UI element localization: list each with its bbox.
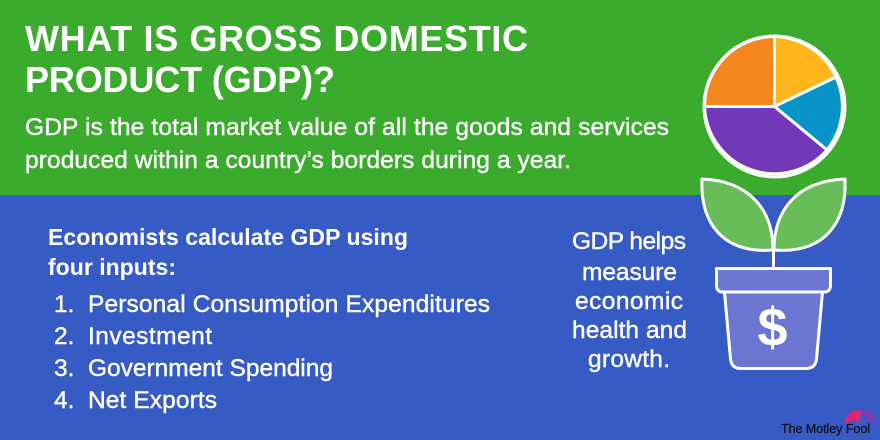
panel: green header background <box>0 0 880 195</box>
right leaf <box>774 179 845 250</box>
list item 3: 3. <box>54 355 74 382</box>
side note text <box>572 228 687 373</box>
pot rim <box>716 268 830 292</box>
logo jester hat <box>845 410 877 425</box>
intro text: four inputs <box>48 224 408 280</box>
pie slice: blue <box>774 77 842 150</box>
icon: plant leaves and stem <box>702 179 845 268</box>
pie slice: purple <box>704 106 827 174</box>
list item 1: Personal Consumption Expenditures <box>88 291 490 318</box>
definition text: produced within a country’s borders during a year. <box>25 147 571 174</box>
side note text: economic <box>575 288 683 315</box>
list item 4: Net Exports <box>88 387 217 414</box>
stem <box>772 250 775 268</box>
pie slice: yellow <box>774 36 836 106</box>
title: WHAT IS GROSS DOMESTIC <box>25 18 528 59</box>
intro text: four inputs: four inputs: <box>48 254 176 280</box>
panel: blue lower background <box>0 195 880 440</box>
dollar sign: $ <box>757 298 788 358</box>
numbered list of GDP inputs <box>54 291 490 414</box>
intro text: four inputs: Economists calculate GDP using <box>48 224 408 250</box>
title <box>25 18 528 100</box>
list item 4: 4. <box>54 387 74 414</box>
definition text <box>25 114 669 174</box>
pie outline <box>704 36 845 177</box>
pot body <box>724 292 822 368</box>
definition text: GDP is the total market value of all the goods and services <box>25 114 669 141</box>
list item 2: Investment <box>88 323 212 350</box>
list item 1: 1. <box>54 291 74 318</box>
icon: flower pot with dollar sign <box>716 268 830 368</box>
side note text: growth. <box>588 346 670 373</box>
side note text: measure <box>582 259 677 286</box>
title: PRODUCT (GDP)? <box>25 59 335 100</box>
left leaf <box>702 179 773 250</box>
side note text: GDP helps <box>572 228 686 255</box>
logo: The Motley Fool <box>781 410 877 436</box>
list item 2: 2. <box>54 323 74 350</box>
side note text: health and <box>572 317 687 344</box>
pie slice: orange <box>704 36 774 106</box>
icon: pie chart flower <box>704 36 845 177</box>
logo wordmark: The Motley Fool <box>781 422 870 436</box>
list item 3: Government Spending <box>88 355 333 382</box>
